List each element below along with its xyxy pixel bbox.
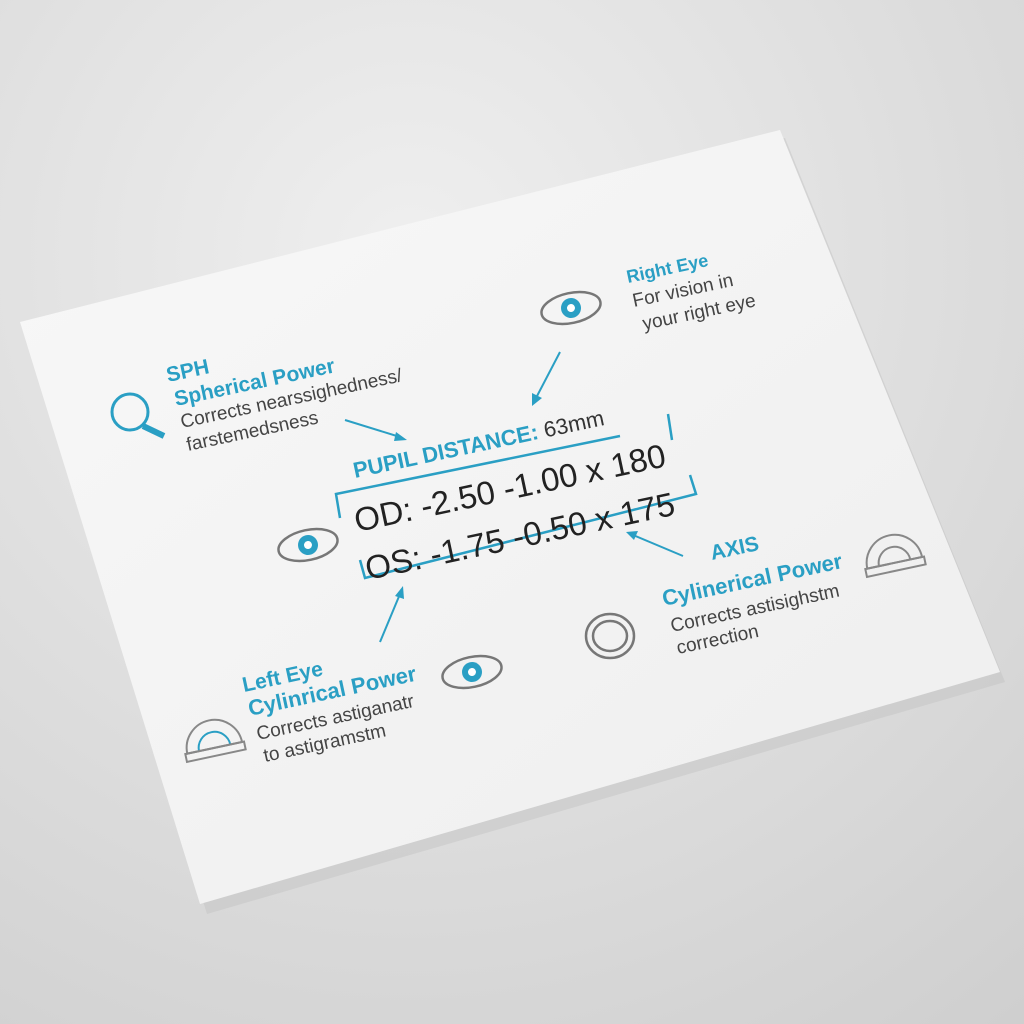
callout: left eye <box>179 651 504 767</box>
callout: right eye: Right Eye <box>625 250 710 287</box>
arrow: right eye <box>532 352 560 406</box>
callout: left eye: to astigramstm <box>262 720 388 767</box>
callout: SPH: farstemedsness <box>185 407 320 456</box>
prescription box: OD: -2.50 -1.00 x 180 <box>351 437 669 539</box>
callout: right eye: For vision in <box>631 270 735 312</box>
callout: SPH <box>112 354 405 456</box>
callout: axis: AXIS <box>708 532 761 565</box>
callout: axis <box>586 529 926 659</box>
callout: SPH: Corrects nearssighedness/ <box>179 365 405 433</box>
callout: axis: Corrects astisighstm <box>669 581 841 637</box>
callout: left eye: Cylinrical Power <box>246 661 419 721</box>
callout: right eye: your right eye <box>641 290 758 335</box>
card <box>20 130 1005 914</box>
callout: left eye: Corrects astiganatr <box>255 691 417 745</box>
arrow: left eye <box>380 586 404 642</box>
callout: axis: Cylinerical Power <box>660 548 845 611</box>
prescription box: PUPIL DISTANCE: 63mm <box>351 405 606 483</box>
arrow: axis <box>626 531 683 556</box>
prescription box: OS: -1.75 -0.50 x 175 <box>362 485 678 587</box>
arrow: SPH <box>345 420 407 441</box>
callout: left eye: Left Eye <box>240 657 325 697</box>
callout: axis: correction <box>675 621 761 659</box>
icon: eye left <box>276 524 340 566</box>
prescription box <box>336 405 696 587</box>
callout: SPH: SPH <box>164 355 211 387</box>
callout: SPH: Spherical Power <box>172 354 337 411</box>
callout: right eye <box>539 250 758 335</box>
